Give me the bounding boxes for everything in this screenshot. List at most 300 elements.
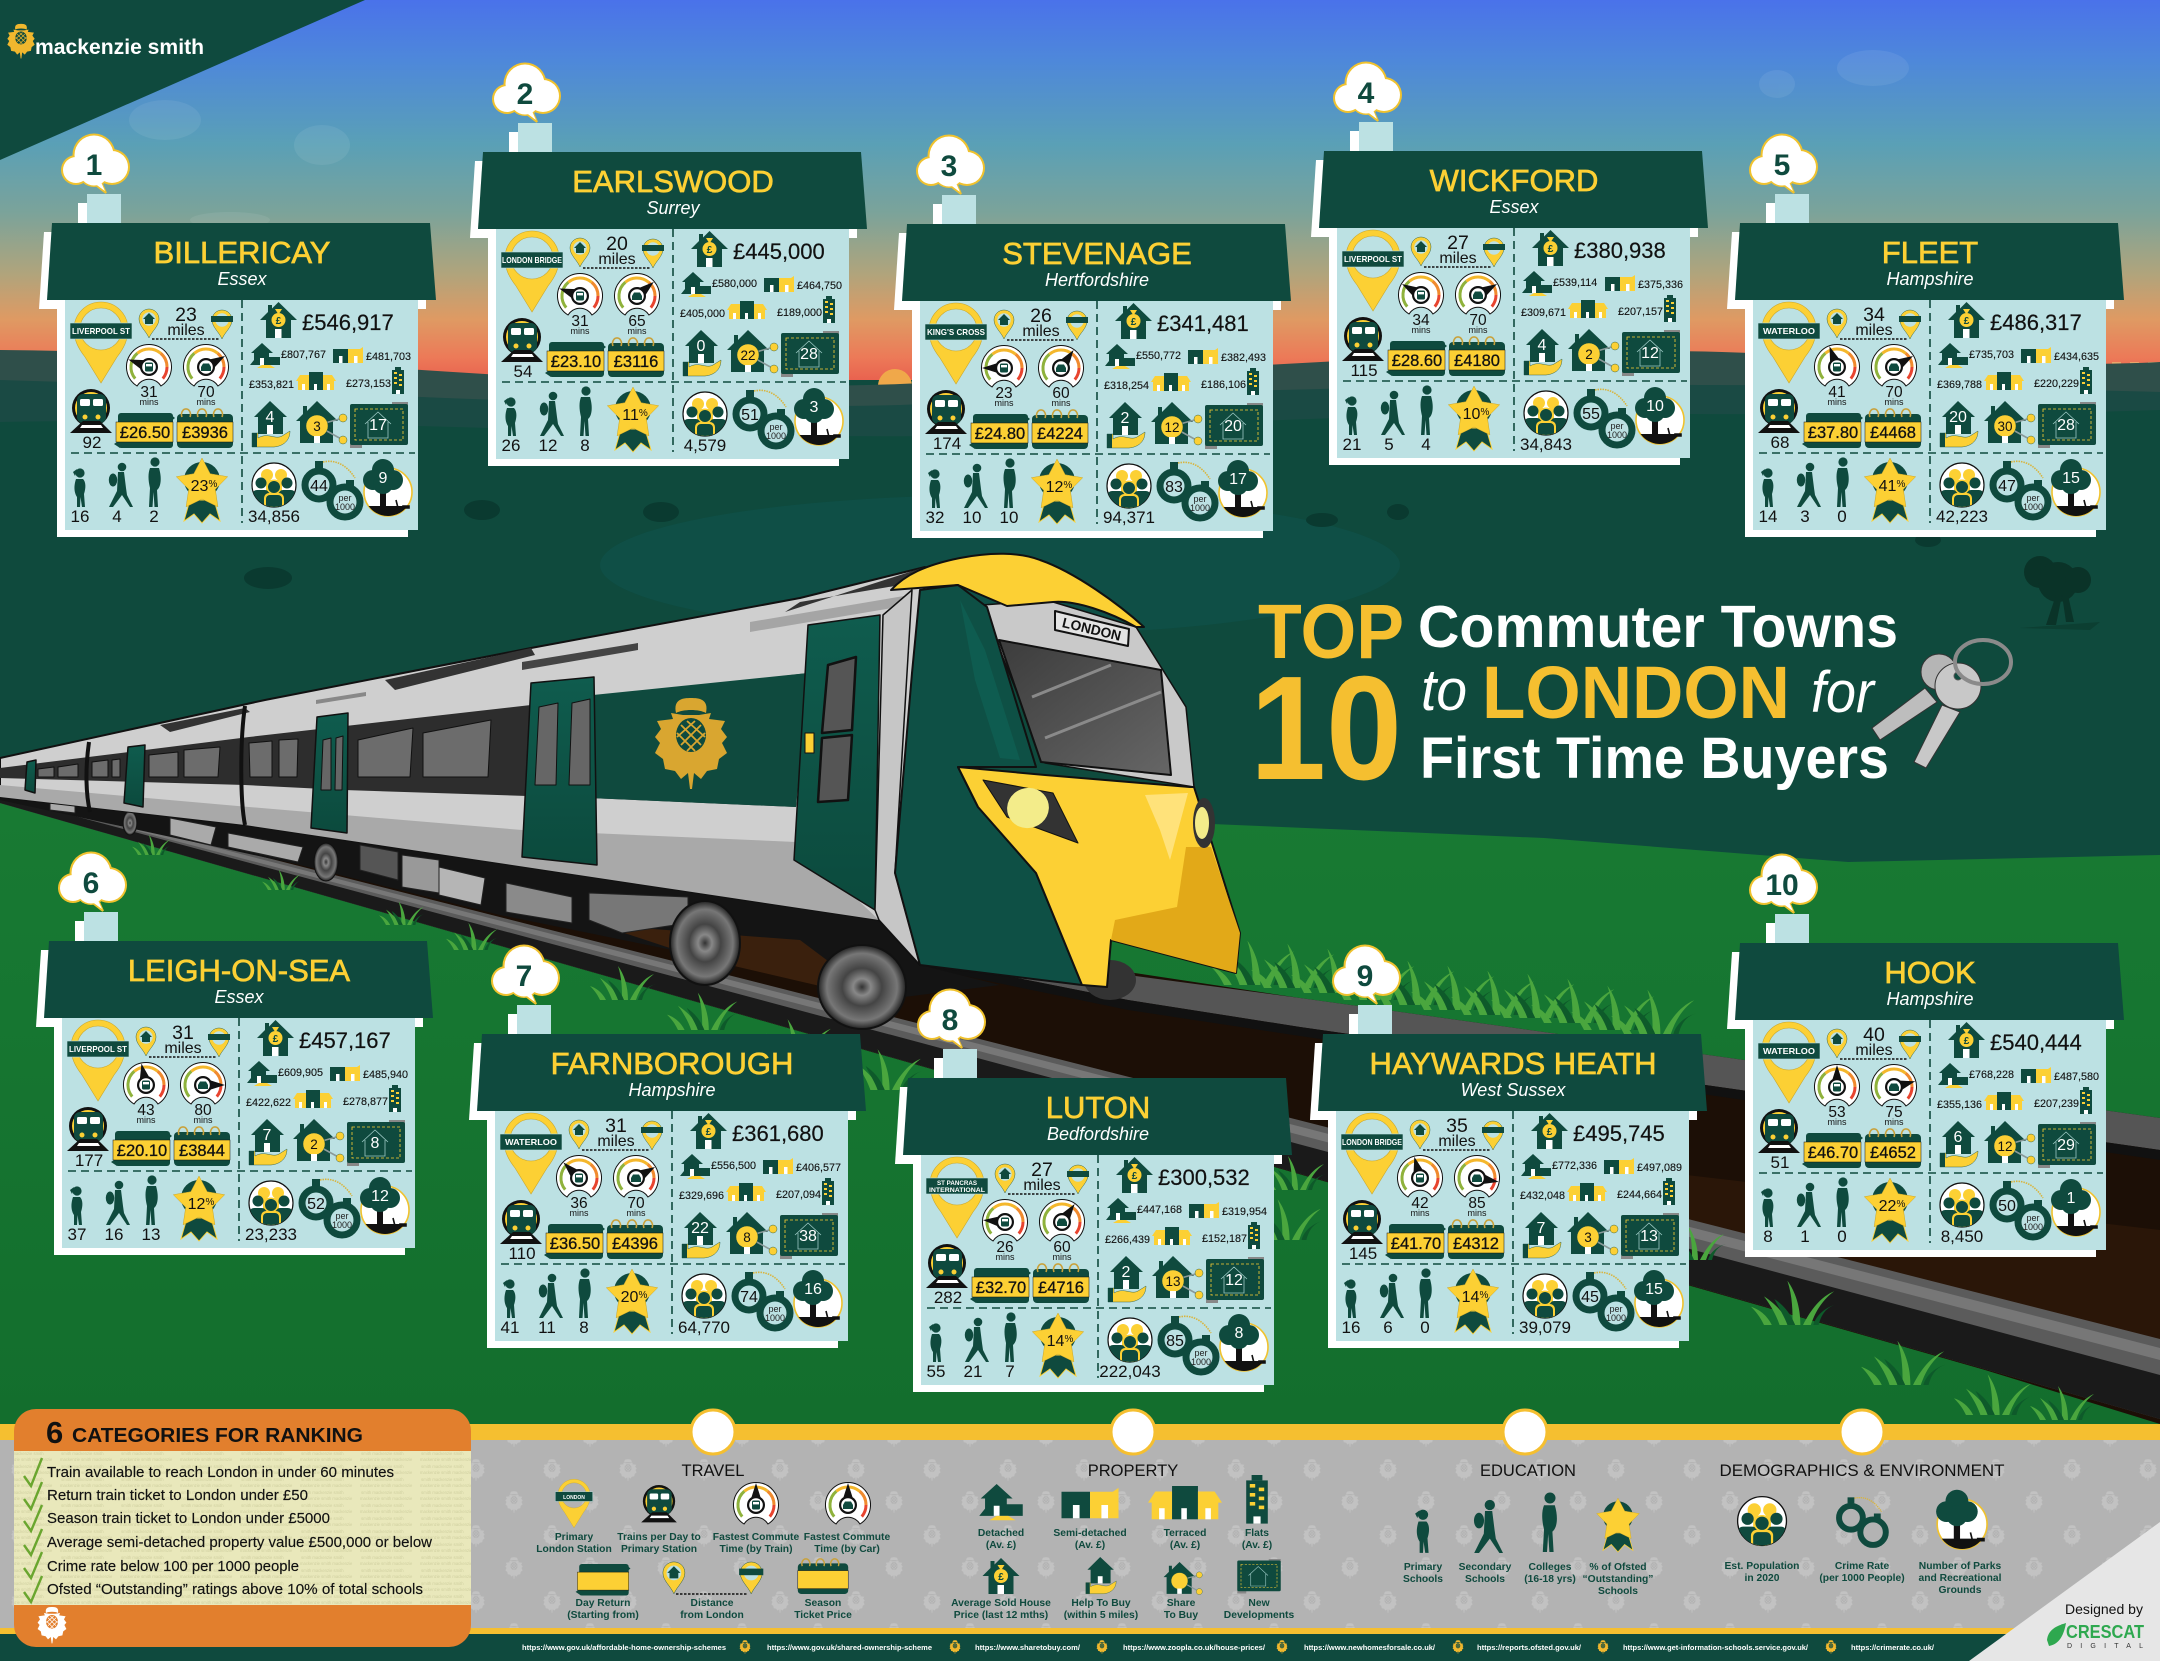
day return ticket: £46.70	[1808, 1144, 1858, 1162]
car commute gauge: mins	[1051, 398, 1071, 408]
schools	[71, 457, 161, 526]
parks: 15	[2062, 470, 2080, 487]
primary station pin: KING'S CROSS	[927, 327, 985, 337]
parks	[791, 388, 847, 447]
car commute gauge: 85	[1468, 1195, 1486, 1212]
legend terraced: Terraced	[1164, 1528, 1206, 1539]
schools	[927, 1312, 1017, 1381]
legend trains per day: Trains per Day to	[617, 1532, 701, 1543]
ofsted star: 20	[621, 1289, 638, 1306]
season ticket	[1032, 410, 1088, 449]
average sold price	[1532, 230, 1666, 266]
ofsted star: 10	[1463, 406, 1480, 423]
day return ticket	[544, 1224, 605, 1259]
crime rate: 51	[741, 407, 759, 424]
train commute gauge	[1814, 1064, 1860, 1127]
schools	[502, 386, 592, 455]
silver cab strip	[875, 590, 920, 965]
property type prices: £318,254	[1104, 380, 1149, 392]
house and town name: Bedfordshire	[1047, 1124, 1149, 1144]
parks	[1631, 1270, 1687, 1329]
legend parks: and Recreational	[1919, 1573, 2002, 1584]
legend share to buy: To Buy	[1164, 1610, 1198, 1621]
car commute gauge: 75	[1885, 1104, 1903, 1121]
logo: mackenzie smith	[35, 36, 204, 59]
driver door windows	[818, 657, 856, 802]
property type prices: £278,877	[343, 1096, 388, 1108]
crime rate: 50	[1998, 1198, 2016, 1215]
train commute gauge	[123, 1062, 168, 1125]
schools: 8	[579, 1318, 589, 1337]
property type prices	[1937, 343, 2099, 394]
legend primary station: London Station	[536, 1544, 612, 1555]
property type prices: £207,239	[2034, 1098, 2079, 1110]
distance from London: 27	[1031, 1159, 1053, 1181]
legend crime rate	[1819, 1497, 1905, 1584]
season ticket	[174, 1127, 230, 1166]
legend season ticket: Season	[805, 1598, 841, 1609]
property type prices: £406,577	[796, 1162, 841, 1174]
grass tufts along the track	[132, 835, 2096, 1420]
ofsted star: 23	[191, 478, 208, 495]
help to buy	[249, 1119, 287, 1165]
chimney cloud number	[1333, 62, 1402, 121]
help to buy: 20	[1949, 409, 1967, 426]
new developments	[1621, 1213, 1679, 1259]
season ticket: £4468	[1870, 424, 1916, 442]
card 6: Leigh-on-Sea	[36, 852, 433, 1255]
help to buy: 6	[1954, 1129, 1963, 1146]
crime rate: 1000	[1190, 503, 1210, 513]
help to buy	[1524, 329, 1562, 375]
new developments: 20	[1224, 418, 1242, 435]
legend terraced	[1148, 1486, 1222, 1551]
property type prices: £735,703	[1969, 349, 2014, 361]
primary station pin: LONDON BRIDGE	[502, 255, 562, 265]
car commute gauge	[1872, 1064, 1917, 1127]
car commute gauge	[614, 273, 660, 336]
cab highlight	[960, 600, 1020, 760]
house and town name: Essex	[214, 987, 265, 1007]
source links: https://www.newhomesforsale.co.uk/	[1304, 1643, 1436, 1652]
property type prices: £422,622	[246, 1097, 291, 1109]
house and town name	[1310, 1005, 1707, 1348]
new developments	[350, 402, 408, 448]
ofsted star	[176, 458, 228, 523]
crime rate: per	[2026, 1213, 2040, 1223]
card 7: Farnborough	[469, 944, 866, 1348]
distance from London: 31	[605, 1115, 627, 1137]
panel: 6 categories for ranking	[14, 1409, 471, 1647]
population	[1103, 464, 1155, 527]
house and town name: Essex	[217, 269, 268, 289]
legend primary station: LONDON	[563, 1495, 585, 1501]
population: 23,233	[245, 1225, 297, 1244]
crime rate: 1000	[1191, 1357, 1211, 1367]
schools: 32	[926, 508, 944, 527]
new developments: 28	[2057, 417, 2075, 434]
car commute gauge	[1872, 344, 1917, 407]
grass field	[0, 803, 2160, 1424]
primary station pin	[70, 302, 132, 383]
property type prices: £309,671	[1521, 307, 1566, 319]
schools	[501, 1268, 591, 1337]
source links: https://crimerate.co.uk/	[1851, 1643, 1935, 1652]
distance from London: miles	[1439, 250, 1477, 267]
property type prices	[679, 1154, 841, 1205]
legend average sold	[951, 1558, 1051, 1621]
section marker circles	[691, 1410, 1884, 1454]
crime rate	[305, 461, 360, 517]
train commute gauge	[982, 345, 1026, 408]
day return ticket: £28.60	[1392, 352, 1442, 370]
house and town name: West Sussex	[1461, 1080, 1566, 1100]
car commute gauge	[184, 344, 229, 407]
property type prices	[1520, 1154, 1682, 1205]
cab silver surround	[982, 602, 1194, 787]
footer band	[0, 1424, 2160, 1661]
day return ticket	[1802, 1133, 1863, 1168]
schools	[1759, 457, 1849, 526]
legend colleges: Colleges	[1529, 1562, 1572, 1573]
crime rate: per	[338, 493, 352, 503]
nose highlight	[1145, 793, 1188, 860]
distance from London: miles	[1855, 322, 1893, 339]
main title: for	[1811, 660, 1876, 725]
main title: TOP	[1258, 589, 1404, 675]
legend help to buy: Help To Buy	[1071, 1598, 1131, 1609]
legend primary schools	[1403, 1510, 1443, 1585]
house and town name: Hampshire	[1886, 989, 1974, 1009]
parks	[2048, 1179, 2104, 1238]
population	[1520, 391, 1572, 454]
ofsted star: %	[208, 479, 217, 490]
population	[683, 392, 727, 455]
schools: 37	[68, 1225, 86, 1244]
new developments: 8	[371, 1135, 380, 1152]
day return ticket: £23.10	[551, 353, 601, 371]
legend share to buy	[1164, 1562, 1202, 1621]
property type prices	[246, 1061, 408, 1112]
crime rate	[1161, 1316, 1216, 1372]
chimney cloud number	[492, 62, 561, 122]
train commute gauge: mins	[1827, 1117, 1847, 1127]
legend flats: (Av. £)	[1242, 1540, 1272, 1551]
house and town name	[1311, 122, 1708, 465]
house and town name: Essex	[1489, 197, 1540, 217]
property type prices: £273,153	[346, 378, 391, 390]
legend train commute: Time (by Train)	[719, 1544, 793, 1555]
schools: 14	[1759, 507, 1777, 526]
crime rate: 1000	[765, 1313, 785, 1323]
legend crime rate: Crime Rate	[1835, 1561, 1889, 1572]
legend secondary schools: Secondary	[1459, 1562, 1512, 1573]
legend parks	[1919, 1490, 2002, 1596]
schools: 1	[1800, 1227, 1810, 1246]
share to buy: 12	[1997, 1139, 2013, 1154]
ofsted star: %	[639, 408, 648, 419]
distance from London: 31	[172, 1022, 194, 1044]
chimney cloud number: 5	[1774, 149, 1790, 182]
train commute gauge: 43	[137, 1102, 155, 1119]
share to buy: 2	[1585, 347, 1593, 362]
primary station pin	[501, 231, 563, 312]
legend crime rate: (per 1000 People)	[1819, 1573, 1905, 1584]
help to buy: 4	[1538, 337, 1547, 354]
top-left brand corner	[0, 0, 365, 160]
legend parks: Grounds	[1939, 1585, 1982, 1596]
population	[245, 1181, 297, 1244]
season ticket: £3936	[182, 424, 228, 442]
designer credit	[2047, 1601, 2144, 1650]
panel heading: 6	[46, 1415, 63, 1450]
help to buy: 0	[697, 338, 706, 355]
new developments	[780, 1213, 838, 1259]
train commute gauge: 31	[571, 313, 589, 330]
house and town name: HAYWARDS HEATH	[1369, 1046, 1657, 1081]
ofsted star: %	[638, 1290, 647, 1301]
season ticket: £4224	[1037, 425, 1083, 443]
car commute gauge: 70	[1885, 384, 1903, 401]
property type prices: £768,228	[1969, 1069, 2014, 1081]
property type prices: £353,821	[249, 379, 294, 391]
legend season ticket: Ticket Price	[794, 1610, 852, 1621]
ofsted star	[1447, 1269, 1499, 1334]
population: 222,043	[1099, 1362, 1161, 1381]
trains per day	[1342, 317, 1384, 380]
schools: 13	[142, 1225, 160, 1244]
legend parks: Number of Parks	[1919, 1561, 2001, 1572]
average sold price	[1531, 1113, 1665, 1149]
day return ticket	[545, 342, 606, 377]
property type prices: £186,106	[1201, 379, 1246, 391]
trains per day	[1758, 389, 1800, 452]
trains per day: 145	[1349, 1244, 1377, 1263]
legend ofsted: % of Ofsted	[1589, 1562, 1647, 1573]
trains per day: 92	[83, 433, 101, 452]
check list: Return train ticket to London under £50	[47, 1487, 308, 1504]
car commute gauge: 70	[197, 384, 215, 401]
legend car commute	[804, 1482, 890, 1555]
property type prices: £375,336	[1638, 279, 1683, 291]
population: 39,079	[1519, 1318, 1571, 1337]
legend population: in 2020	[1745, 1573, 1780, 1584]
roof dark sections	[160, 567, 930, 732]
average sold price: £546,917	[302, 310, 394, 335]
chimney cloud number: 9	[1357, 960, 1373, 993]
crime rate	[1993, 461, 2048, 517]
main title: 10	[1250, 646, 1402, 811]
crime rate: 1000	[1606, 1313, 1626, 1323]
legend flats: Flats	[1245, 1528, 1269, 1539]
legend flats	[1242, 1475, 1272, 1551]
car commute gauge: mins	[627, 326, 647, 336]
ofsted star: %	[1896, 479, 1905, 490]
car commute gauge: 65	[628, 313, 646, 330]
share to buy: 30	[1997, 419, 2013, 434]
train commute gauge: 53	[1828, 1104, 1846, 1121]
train commute gauge: 26	[996, 1239, 1014, 1256]
distance from London: miles	[167, 322, 205, 339]
season ticket: £4652	[1870, 1144, 1916, 1162]
day return ticket	[1385, 1224, 1446, 1259]
crime rate: per	[1609, 1304, 1623, 1314]
house and town name: Surrey	[646, 198, 701, 218]
yellow nose	[958, 767, 1240, 987]
house and town name: Hampshire	[628, 1080, 716, 1100]
train commute gauge: mins	[136, 1115, 156, 1125]
crime rate: 45	[1581, 1289, 1599, 1306]
ofsted star: 14	[1047, 1333, 1064, 1350]
schools: 41	[501, 1318, 519, 1337]
schools: 12	[539, 436, 557, 455]
house and town name: LUTON	[1046, 1090, 1150, 1125]
schools: 26	[502, 436, 520, 455]
property type prices: £244,664	[1617, 1189, 1662, 1201]
designer credit: DIGITAL	[2067, 1643, 2143, 1650]
house and town name: FARNBOROUGH	[551, 1046, 793, 1081]
house and town name: Hampshire	[1886, 269, 1974, 289]
legend colleges	[1524, 1492, 1576, 1585]
parks	[357, 1177, 413, 1236]
population: 8,450	[1941, 1227, 1983, 1246]
season ticket	[1033, 1264, 1089, 1303]
day return ticket: £26.50	[120, 424, 170, 442]
population: 4,579	[684, 436, 726, 455]
ofsted star: 12	[188, 1196, 205, 1213]
property type prices: £207,094	[776, 1189, 821, 1201]
crime rate: 47	[1998, 478, 2016, 495]
share to buy	[293, 1119, 344, 1162]
card 3: Stevenage	[894, 134, 1291, 538]
car commute gauge: mins	[1884, 397, 1904, 407]
card 9: Haywards Heath	[1310, 944, 1707, 1348]
schools: 16	[1342, 1318, 1360, 1337]
primary station pin	[925, 303, 987, 384]
property type prices: £207,157	[1618, 306, 1663, 318]
car commute gauge: mins	[196, 397, 216, 407]
car commute gauge: mins	[1052, 1252, 1072, 1262]
window band	[0, 673, 808, 807]
legend help to buy	[1064, 1557, 1138, 1621]
car commute gauge	[1454, 1155, 1500, 1218]
share to buy	[726, 1212, 777, 1255]
legend: demographics and environment	[1720, 1462, 2004, 1596]
ofsted star: 11	[622, 407, 639, 424]
legend train commute	[713, 1482, 799, 1555]
chimney cloud number	[491, 944, 560, 1004]
average sold price: £445,000	[733, 239, 825, 264]
average sold price	[690, 1113, 824, 1149]
property type prices	[1105, 1198, 1267, 1249]
designer credit: CRESCAT	[2066, 1622, 2144, 1642]
car commute gauge: mins	[626, 1208, 646, 1218]
share to buy: 12	[1164, 420, 1180, 435]
trains per day	[501, 318, 543, 381]
train windows	[38, 720, 491, 777]
day return ticket: £32.70	[976, 1279, 1026, 1297]
house and town name: EARLSWOOD	[572, 164, 774, 199]
property type prices: £382,493	[1221, 352, 1266, 364]
legend new developments: New	[1248, 1598, 1271, 1609]
crime rate: 52	[307, 1196, 325, 1213]
schools: 16	[105, 1225, 123, 1244]
parks	[790, 1270, 846, 1329]
legend terraced: (Av. £)	[1170, 1540, 1200, 1551]
new developments	[1622, 330, 1680, 376]
car commute gauge: 60	[1053, 1239, 1071, 1256]
train commute gauge: 36	[570, 1195, 588, 1212]
trains per day: 282	[934, 1288, 962, 1307]
primary station pin: WATERLOO	[1763, 326, 1815, 336]
property type prices: £497,089	[1637, 1162, 1682, 1174]
trains per day	[1341, 1200, 1383, 1263]
icon: keys	[1872, 640, 2011, 768]
house and town name	[1727, 914, 2124, 1257]
share to buy: 3	[1584, 1230, 1592, 1245]
legend detached: Detached	[978, 1528, 1024, 1539]
distance from London: miles	[1023, 1177, 1061, 1194]
distance from London	[569, 1115, 663, 1150]
help to buy	[683, 330, 721, 376]
chimney cloud number: 1	[86, 149, 102, 182]
primary station pin	[500, 1113, 562, 1194]
legend: property: PROPERTY	[1088, 1462, 1178, 1480]
parks: 10	[1646, 398, 1664, 415]
schools	[68, 1175, 160, 1244]
population: 34,856	[248, 507, 300, 526]
panel heading	[46, 1415, 363, 1450]
trains per day	[925, 390, 967, 453]
legend primary schools: Schools	[1403, 1574, 1443, 1585]
house and town name: LEIGH-ON-SEA	[128, 953, 350, 988]
ofsted star	[1031, 459, 1083, 524]
thistle emblem on train	[655, 698, 727, 789]
source links: https://www.sharetobuy.com/	[975, 1643, 1081, 1652]
background: sky, sun and hills	[0, 0, 2160, 900]
population	[1519, 1274, 1571, 1337]
day return ticket	[969, 414, 1030, 449]
main title: to	[1421, 658, 1467, 723]
share to buy	[1984, 401, 2035, 444]
legend: travel	[536, 1462, 890, 1621]
property type prices: £556,500	[711, 1160, 756, 1172]
crime rate: 44	[310, 478, 328, 495]
ofsted star: %	[1480, 407, 1489, 418]
primary station pin	[1758, 302, 1820, 383]
lower shading	[0, 785, 879, 920]
season ticket: £4312	[1453, 1235, 1499, 1253]
cab green front	[895, 585, 1082, 985]
car commute gauge	[180, 1062, 226, 1125]
property type prices: £319,954	[1222, 1206, 1267, 1218]
house and town name	[36, 912, 433, 1255]
share to buy: 2	[310, 1137, 318, 1152]
schools: 16	[71, 507, 89, 526]
primary station pin	[1341, 1113, 1403, 1194]
chimney cloud number: 3	[941, 150, 957, 183]
train commute gauge: 34	[1412, 312, 1430, 329]
schools: 5	[1384, 435, 1394, 454]
average sold price	[1116, 1157, 1250, 1193]
chimney cloud number	[58, 852, 127, 911]
primary station pin: INTERNATIONAL	[929, 1187, 985, 1194]
schools: 21	[1343, 435, 1361, 454]
new developments: 29	[2057, 1137, 2075, 1154]
distance from London: miles	[1855, 1042, 1893, 1059]
average sold price	[260, 302, 394, 338]
designer credit: Designed by	[2065, 1601, 2143, 1617]
